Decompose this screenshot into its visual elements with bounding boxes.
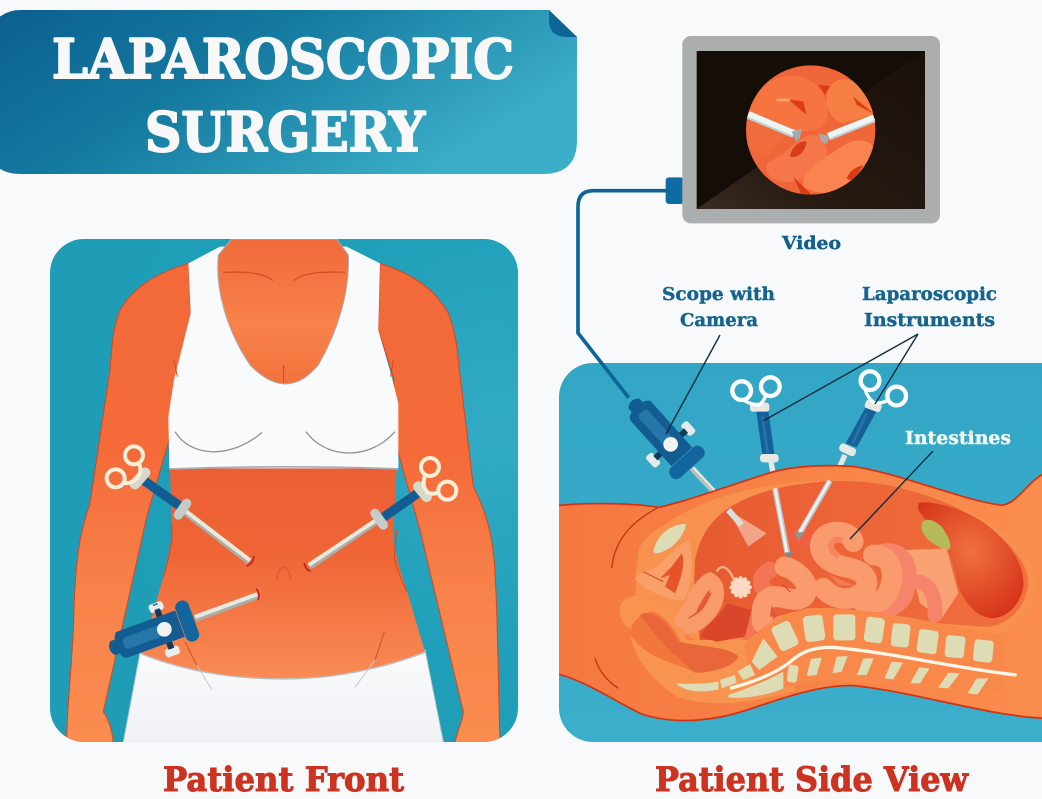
- title text: SURGERY: [145, 100, 426, 164]
- title text: [52, 27, 514, 164]
- chest and neck: [218, 239, 348, 384]
- monitor: [578, 36, 940, 398]
- cable and connector: [578, 177, 684, 398]
- label: scope with camera: Scope with: [662, 285, 775, 305]
- label: intestines: Intestines: [905, 429, 1011, 449]
- panel: patient front: [50, 239, 518, 742]
- body: arms: [67, 263, 500, 742]
- laparoscopic instrument 2: [838, 371, 906, 457]
- label: scope with camera: Camera: [680, 311, 758, 331]
- title banner: [0, 10, 577, 174]
- organ cavity lining: [636, 481, 928, 640]
- instrument rods inside: [775, 481, 830, 558]
- spine vertebrae: [676, 608, 1002, 698]
- leader lines: [666, 334, 933, 539]
- label: laparoscopic instruments: [862, 285, 997, 331]
- scope with camera, side: [628, 398, 705, 480]
- hip creases: [185, 632, 384, 665]
- body cross-section: [555, 466, 1042, 721]
- small intestine: [748, 532, 958, 637]
- label: laparoscopic instruments: Laparoscopic: [862, 285, 997, 305]
- spinal cord: [730, 647, 1017, 688]
- title text: LAPAROSCOPIC: [52, 27, 514, 91]
- navel: [277, 567, 291, 580]
- pelvic organs: [620, 515, 797, 703]
- panel: patient side view: [555, 363, 1042, 742]
- left instrument: [107, 446, 254, 566]
- abdomen: [142, 468, 425, 678]
- white shorts: [123, 650, 443, 742]
- label: scope with camera: [662, 285, 775, 331]
- light cone from scope: [734, 515, 766, 546]
- stomach: [918, 502, 1023, 618]
- abdominal cavity: [693, 481, 1028, 642]
- caption: patient side view: Patient Side View: [655, 760, 969, 799]
- endoscope view: [746, 65, 877, 195]
- scope with camera, front: [109, 588, 260, 658]
- caption: patient front: Patient Front: [163, 760, 404, 799]
- white bra: [168, 247, 398, 468]
- instrument rods outside: [692, 455, 845, 497]
- label: video: Video: [781, 233, 841, 254]
- right instrument: [304, 458, 456, 571]
- label: laparoscopic instruments: Instruments: [864, 311, 995, 331]
- laparoscopic instrument 1: [732, 377, 780, 462]
